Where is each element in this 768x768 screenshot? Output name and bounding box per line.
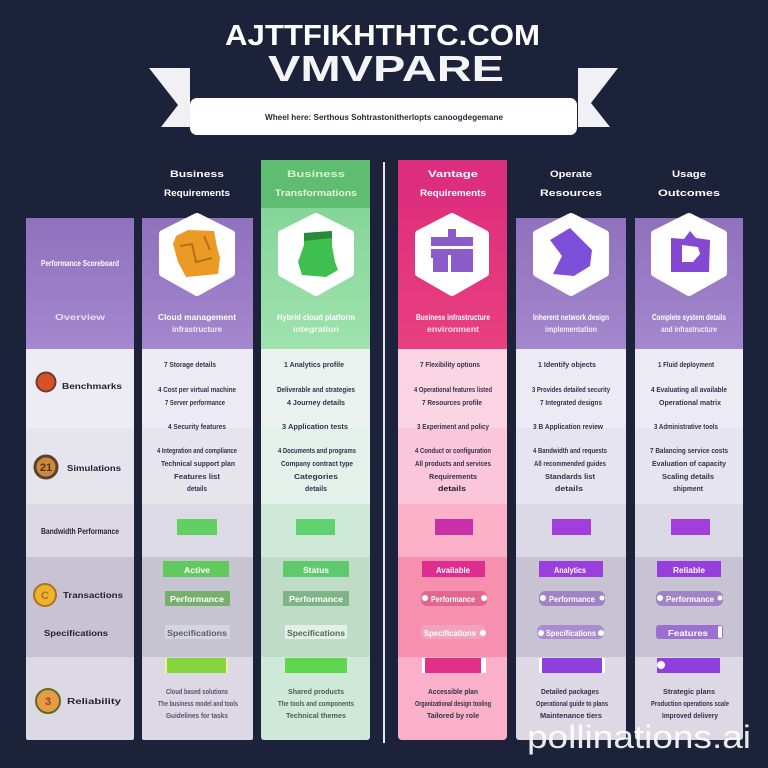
panel: column 1: Cloud management xyxy=(158,313,236,322)
panel: column 5: Complete system details xyxy=(652,313,726,322)
panel: column 2 green: Hybrid cloud platform xyxy=(277,313,355,322)
panel: column 3 pink: details xyxy=(438,484,466,493)
green status bars: Specifications xyxy=(287,629,346,638)
panel: column 2 green: The tools and components xyxy=(278,699,354,708)
panel: column 4: Operational guide to plans xyxy=(536,699,608,708)
panel: row labels: Bandwidth Performance xyxy=(41,527,119,536)
icon: purple hexagon xyxy=(537,217,605,292)
panel: column 3 pink: 7 Resources profile xyxy=(422,398,482,407)
icon: brown badge xyxy=(35,456,57,478)
panel: column 5: Strategic plans xyxy=(663,687,715,696)
panel: row labels: Specifications xyxy=(44,629,109,638)
panel: row labels: Simulations xyxy=(67,464,122,473)
watermark: pollinations.ai xyxy=(527,719,751,755)
icon: orange hexagon xyxy=(163,217,231,292)
panel: column 3 pink: 4 Operational features listed xyxy=(414,385,492,394)
column heading 3: Vantage xyxy=(428,169,478,179)
panel: column 3 pink: Requirements xyxy=(429,472,477,481)
purple status bars xyxy=(537,519,605,673)
panel: column 5 xyxy=(635,217,743,740)
panel: column 1 xyxy=(142,217,253,740)
column heading 4: Operate xyxy=(550,169,592,179)
column heading 1: Requirements xyxy=(164,188,230,198)
icon: green hexagon xyxy=(282,217,350,292)
panel: column 5: Production operations scale xyxy=(651,699,729,708)
panel: column 2 green: Company contract type xyxy=(281,459,353,468)
ribbon banner: Wheel here: Serthous Sohtrastonitherlopts canoogdegemane xyxy=(265,113,504,122)
column heading 5 xyxy=(658,169,720,198)
purple status bars: Reliable xyxy=(673,566,706,575)
panel: column 1: 7 Server performance xyxy=(165,398,225,407)
panel: column 3 pink: Accessible plan xyxy=(428,687,478,696)
panel: row labels: Performance Scoreboard xyxy=(41,259,119,268)
panel: row labels xyxy=(26,218,134,740)
panel: column 3 pink: 4 Conduct or configuration xyxy=(415,446,491,455)
panel: column 1: Cloud based solutions xyxy=(166,687,228,696)
panel: column 4: implementation xyxy=(545,325,597,334)
panel: column 4: 7 Integrated designs xyxy=(540,398,602,407)
panel: column 1: 4 Security features xyxy=(168,422,226,431)
purple status bars: Performance xyxy=(549,595,596,604)
purple status bars: Analytics xyxy=(554,566,586,575)
panel: column 1: Guidelines for tasks xyxy=(166,711,228,720)
column heading 4: Resources xyxy=(540,188,602,198)
panel: column 1: 4 Cost per virtual machine xyxy=(158,385,236,394)
panel: column 1: 7 Storage details xyxy=(164,360,216,369)
panel: column 2 green: 4 Documents and programs xyxy=(278,446,356,455)
column heading 3: Requirements xyxy=(420,188,486,198)
panel: column 5: 4 Evaluating all available xyxy=(651,385,727,394)
panel: column 2 green: 4 Journey details xyxy=(287,398,345,407)
purple status bars: Performance xyxy=(666,595,715,604)
panel: column 5: Scaling details xyxy=(662,472,714,481)
purple status bars: Features xyxy=(668,629,709,638)
panel: column 3 pink: All products and services xyxy=(415,459,491,468)
panel: column 4: 3 Provides detailed security xyxy=(532,385,611,394)
column heading 4 xyxy=(540,169,602,198)
green status bars: Active xyxy=(184,566,211,575)
column heading 1 xyxy=(164,169,230,198)
panel: column 2 green: Technical themes xyxy=(286,711,346,720)
center divider xyxy=(383,162,385,743)
panel: column 4 xyxy=(516,217,626,740)
icon: pink column hexagon xyxy=(419,217,485,292)
panel: column 4: 3 B Application review xyxy=(533,422,603,431)
pink status bars: Available xyxy=(436,566,471,575)
panel: column 4: Detailed packages xyxy=(541,687,599,696)
icon: violet hexagon xyxy=(655,217,723,292)
panel: column 2 green: integration xyxy=(293,325,339,334)
panel: column 1: Technical support plan xyxy=(161,459,235,468)
panel: row labels: Overview xyxy=(55,313,106,322)
column heading 5: Outcomes xyxy=(658,188,720,198)
panel: column 2 green: Shared products xyxy=(288,687,344,696)
panel: row labels: Benchmarks xyxy=(62,382,123,391)
panel: column 1: Features list xyxy=(174,472,221,481)
panel: column 2 green: Categories xyxy=(294,472,338,481)
panel: column 3 pink: 7 Flexibility options xyxy=(420,360,480,369)
pink status bars xyxy=(420,519,487,673)
green status bars xyxy=(283,519,349,673)
panel: column 4: All recommended guides xyxy=(534,459,606,468)
panel: column 5: shipment xyxy=(673,484,703,493)
panel: column 5: 1 Fluid deployment xyxy=(658,360,714,369)
panel: column 3 pink: 3 Experiment and policy xyxy=(417,422,490,431)
panel: column 2 green: 1 Analytics profile xyxy=(284,360,344,369)
icon: orange coin xyxy=(36,689,60,713)
panel: column 2 green: Deliverable and strategies xyxy=(277,385,355,394)
column heading 2: Transformations xyxy=(275,188,357,198)
panel: column 5: Improved delivery xyxy=(662,711,719,720)
panel: column 5: Operational matrix xyxy=(659,398,722,407)
panel: column 4: 1 Identify objects xyxy=(538,360,596,369)
column heading 5: Usage xyxy=(672,169,706,179)
green status bars: Performance xyxy=(170,595,225,604)
column heading 2: Business xyxy=(287,169,345,179)
green status bars: Performance xyxy=(289,595,344,604)
panel: column 1: The business model and tools xyxy=(158,699,238,708)
title: AJTTFIKHTHTC.COM xyxy=(225,20,540,52)
panel: column 1: 4 Integration and compliance xyxy=(157,446,237,455)
green status bars xyxy=(163,519,230,673)
green status bars: Specifications xyxy=(167,629,228,638)
panel: column 4: Maintenance tiers xyxy=(540,711,602,720)
column heading 2 xyxy=(275,169,357,198)
icon: brown badge: 21 xyxy=(40,462,52,474)
panel: column 4: Inherent network design xyxy=(533,313,609,322)
panel: column 1: infrastructure xyxy=(172,325,223,334)
panel: row labels: Reliability xyxy=(67,697,122,706)
panel: column 3 pink: environment xyxy=(427,325,479,334)
panel: column 5: Evaluation of capacity xyxy=(652,459,727,468)
icon: red badge xyxy=(35,371,57,393)
panel: column 3 pink: Tailored by role xyxy=(427,711,479,720)
panel: column 3 pink: Business infrastructure xyxy=(416,313,490,322)
panel: column 2 green xyxy=(261,160,370,740)
panel: column 5: 3 Administrative tools xyxy=(654,422,718,431)
panel: column 5: and infrastructure xyxy=(661,325,717,334)
column heading 1: Business xyxy=(170,169,224,179)
panel: column 1: details xyxy=(187,484,207,493)
icon: gold coin: C xyxy=(41,590,49,602)
title: VMVPARE xyxy=(268,48,504,89)
icon: orange coin: 3 xyxy=(45,696,51,708)
pink status bars: Performance xyxy=(431,595,475,604)
green status bars: Status xyxy=(303,566,330,575)
title xyxy=(225,20,540,89)
pink status bars: Specifications xyxy=(424,629,477,638)
purple status bars: Specifications xyxy=(546,629,596,638)
panel: row labels: Transactions xyxy=(63,591,124,600)
icon: gold coin xyxy=(34,584,56,606)
panel: column 5: 7 Balancing service costs xyxy=(650,446,728,455)
column heading 3 xyxy=(420,169,486,198)
panel: column 4: details xyxy=(555,484,583,493)
panel: column 2 green: details xyxy=(305,484,327,493)
ribbon banner xyxy=(149,68,618,135)
panel: column 3 pink: Organizational design tooling xyxy=(415,699,491,708)
panel: column 2 green: 3 Application tests xyxy=(282,422,348,431)
purple status bars xyxy=(656,519,723,673)
panel: column 3 pink xyxy=(398,160,507,740)
panel: column 4: Standards list xyxy=(545,472,595,481)
panel: column 4: 4 Bandwidth and requests xyxy=(533,446,607,455)
